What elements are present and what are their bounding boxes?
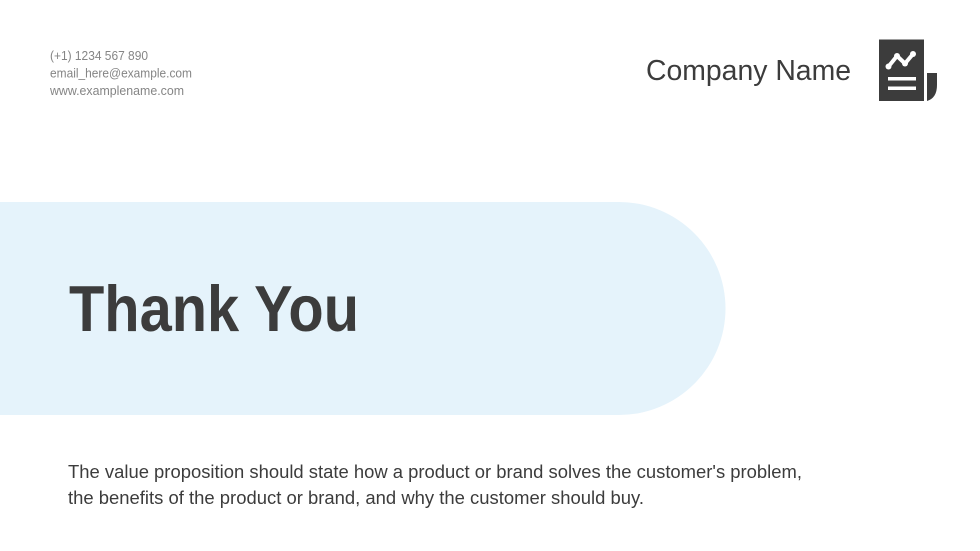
contact details: email_here@example.com [50,66,192,80]
title: Thank You [69,272,359,345]
icon: newspaper logo [879,40,937,101]
contact details: (+1) 1234 567 890 [50,49,148,63]
company name: Company Name [646,55,851,87]
contact details [49,49,192,98]
value proposition text: the benefits of the product or brand, and why the customer should buy. [68,487,644,508]
value proposition text [68,461,802,508]
banner: light blue rounded panel [0,202,726,415]
contact details: www.examplename.com [49,84,184,98]
value proposition text: The value proposition should state how a product or brand solves the customer's problem, [68,461,802,482]
